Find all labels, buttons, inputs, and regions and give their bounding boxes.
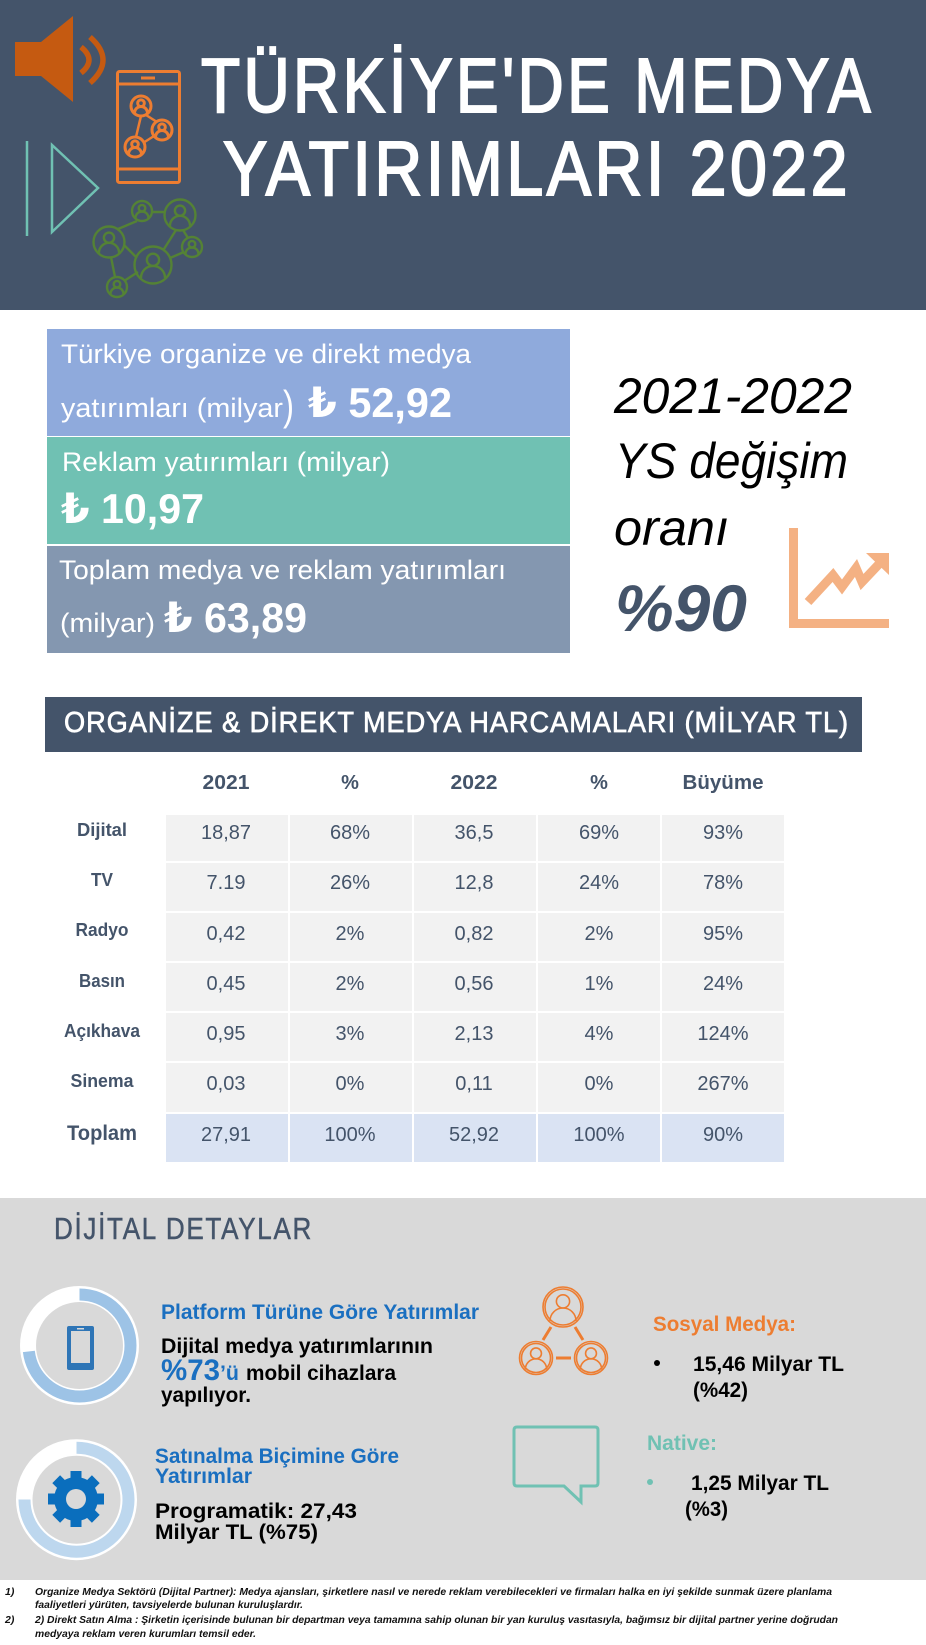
callout: YS değişim oranı: %90 bbox=[615, 571, 747, 645]
row: Açıkhava: Açıkhava bbox=[64, 1021, 141, 1041]
panel: toplam medya ve reklam yatırımları: ₺ 63,89 bbox=[164, 594, 307, 641]
text: sosyal medya: (%42) bbox=[693, 1379, 748, 1402]
panel: toplam medya ve reklam yatırımları bbox=[47, 546, 570, 653]
icon: play triangle bbox=[27, 141, 98, 236]
panel: organize ve direkt medya yatırımları: Türkiye organize ve direkt medya bbox=[61, 339, 472, 369]
footnotes: 1) bbox=[5, 1586, 15, 1598]
row: Dijital: 36,5 bbox=[455, 822, 493, 844]
row: Basın bbox=[79, 963, 784, 1011]
row: Açıkhava: 3% bbox=[336, 1023, 365, 1045]
text: native bbox=[647, 1432, 829, 1521]
table column headers bbox=[202, 772, 764, 794]
row: Basın: 2% bbox=[336, 973, 365, 995]
text: satınalma biçimine göre yatırımlar: Satınalma Biçimine Göre bbox=[155, 1445, 399, 1468]
text: native: Native: bbox=[647, 1432, 717, 1455]
row: Radyo: 95% bbox=[703, 923, 743, 945]
text: sosyal medya bbox=[653, 1313, 844, 1402]
footnotes: 2) Direkt Satın Alma : Şirketin içerisinde bulunan bir departman veya tamamına sahip olunan bir yan kuruluş vasıtasıyla, bağımsız bir dijital partner yerine doğrudan bbox=[34, 1614, 838, 1626]
row: Toplam: 90% bbox=[703, 1124, 743, 1146]
footnotes: faaliyetleri yürüten, tavsiyelerde bulunan kuruluşlardır. bbox=[35, 1599, 303, 1611]
row: Radyo: 2% bbox=[336, 923, 365, 945]
text: platform türüne göre yatırımlar: %73 bbox=[161, 1354, 220, 1387]
row: Toplam: 100% bbox=[573, 1124, 625, 1146]
text: sosyal medya: 15,46 Milyar TL bbox=[693, 1353, 844, 1376]
panel: organize ve direkt medya yatırımları: yatırımları (milyar bbox=[61, 393, 283, 423]
text: satınalma biçimine göre yatırımlar: Yatırımlar bbox=[155, 1465, 252, 1488]
row: Sinema: 0,11 bbox=[455, 1073, 493, 1095]
row: Sinema: 0% bbox=[585, 1073, 614, 1095]
row: Basın: 0,56 bbox=[455, 973, 493, 995]
row: Basın: Basın bbox=[79, 971, 125, 991]
row: TV: 78% bbox=[703, 872, 743, 894]
text: platform türüne göre yatırımlar: yapılıyor. bbox=[161, 1384, 251, 1407]
row: Açıkhava bbox=[64, 1013, 784, 1061]
panel: reklam yatırımları: ₺ 10,97 bbox=[61, 485, 204, 532]
table column headers: 2021 bbox=[202, 772, 250, 794]
text: satınalma biçimine göre yatırımlar bbox=[155, 1445, 399, 1544]
footnotes: medyaya reklam veren kurumları temsil eder. bbox=[35, 1628, 256, 1640]
panel: toplam medya ve reklam yatırımları: Toplam medya ve reklam yatırımları bbox=[59, 555, 506, 585]
footnotes bbox=[4, 1586, 838, 1640]
row: Toplam: Toplam bbox=[67, 1122, 137, 1145]
panel: reklam yatırımları: Reklam yatırımları (milyar) bbox=[62, 447, 390, 477]
heading: dijital detaylar: DİJİTAL DETAYLAR bbox=[54, 1211, 313, 1246]
header banner bbox=[0, 0, 926, 310]
row: Sinema bbox=[70, 1063, 784, 1112]
icon: gear bbox=[48, 1471, 104, 1527]
row: Basın: 24% bbox=[703, 973, 743, 995]
row: Radyo: 2% bbox=[585, 923, 614, 945]
donut: programatik 75% bbox=[16, 1439, 137, 1560]
icon: sosyal medya network bbox=[520, 1287, 608, 1374]
text: platform türüne göre yatırımlar bbox=[161, 1301, 479, 1407]
row: TV: 12,8 bbox=[455, 872, 493, 894]
callout: YS değişim oranı: oranı bbox=[614, 500, 729, 556]
row: Toplam bbox=[67, 1114, 784, 1162]
title bbox=[201, 43, 874, 212]
row: Toplam: 100% bbox=[324, 1124, 376, 1146]
footnotes: Organize Medya Sektörü (Dijital Partner): Medya ajansları, şirketlere nasıl ve nerede reklam verebilecekleri ve firmaları halka en iyi şekilde sunmak üzere planlama bbox=[35, 1586, 832, 1598]
icon: speech bubble bbox=[514, 1427, 598, 1502]
icon: speaker bbox=[15, 16, 103, 102]
table heading: ORGANİZE & DİREKT MEDYA HARCAMALARI (MİLYAR TL) bbox=[64, 706, 849, 739]
row: Basın: 1% bbox=[585, 973, 614, 995]
donut: mobil 73% bbox=[20, 1286, 139, 1405]
text: satınalma biçimine göre yatırımlar: Programatik: 27,43 bbox=[155, 1500, 357, 1523]
row: Açıkhava: 2,13 bbox=[455, 1023, 493, 1045]
row: Sinema: 267% bbox=[697, 1073, 749, 1095]
icon: smartphone network bbox=[117, 72, 180, 182]
panel: organize ve direkt medya yatırımları: ₺ 52,92 bbox=[308, 379, 452, 426]
table: medya harcamaları bbox=[64, 772, 784, 1162]
row: Dijital: 69% bbox=[579, 822, 619, 844]
icon: green people network bbox=[94, 200, 202, 297]
text: sosyal medya: Sosyal Medya: bbox=[653, 1313, 796, 1336]
row: TV: TV bbox=[91, 870, 113, 890]
row: Toplam: 52,92 bbox=[449, 1124, 499, 1146]
row: Radyo: 0,42 bbox=[207, 923, 245, 945]
text: platform türüne göre yatırımlar: Dijital medya yatırımlarının bbox=[161, 1335, 433, 1358]
table column headers: Büyüme bbox=[682, 772, 764, 794]
table column headers: 2022 bbox=[450, 772, 498, 794]
callout: YS değişim oranı: 2021-2022 bbox=[613, 368, 852, 424]
table heading bbox=[45, 697, 862, 752]
callout: YS değişim oranı: YS değişim bbox=[615, 433, 848, 489]
row: Radyo bbox=[76, 913, 784, 961]
row: Basın: 0,45 bbox=[207, 973, 245, 995]
row: TV: 7.19 bbox=[207, 872, 245, 894]
row: Dijital: 68% bbox=[330, 822, 370, 844]
icon: tablet bbox=[67, 1326, 94, 1370]
text: platform türüne göre yatırımlar: mobil cihazlara bbox=[246, 1362, 396, 1385]
row: Açıkhava: 4% bbox=[585, 1023, 614, 1045]
footnotes: 2) bbox=[4, 1614, 15, 1626]
row: TV: 24% bbox=[579, 872, 619, 894]
row: Sinema: Sinema bbox=[70, 1071, 134, 1091]
row: Toplam: 27,91 bbox=[201, 1124, 251, 1146]
row: Sinema: 0,03 bbox=[207, 1073, 245, 1095]
row: Açıkhava: 0,95 bbox=[207, 1023, 245, 1045]
row: Dijital bbox=[77, 815, 784, 861]
row: Açıkhava: 124% bbox=[697, 1023, 749, 1045]
row: Radyo: Radyo bbox=[76, 920, 128, 940]
panel: organize ve direkt medya yatırımları: ) bbox=[283, 382, 294, 429]
row: Dijital: Dijital bbox=[77, 820, 127, 840]
table column headers: % bbox=[590, 772, 608, 794]
text: platform türüne göre yatırımlar: Platform Türüne Göre Yatırımlar bbox=[161, 1301, 479, 1324]
panel: reklam yatırımları bbox=[47, 437, 570, 544]
text: native: (%3) bbox=[685, 1498, 728, 1521]
panel: dijital detaylar bbox=[0, 1198, 926, 1580]
row: Dijital: 18,87 bbox=[201, 822, 251, 844]
table column headers: % bbox=[341, 772, 359, 794]
row: TV: 26% bbox=[330, 872, 370, 894]
row: Radyo: 0,82 bbox=[455, 923, 493, 945]
callout: YS değişim oranı bbox=[613, 368, 852, 645]
text: native: 1,25 Milyar TL bbox=[691, 1472, 829, 1495]
panel: organize ve direkt medya yatırımları bbox=[47, 329, 570, 436]
row: TV bbox=[91, 863, 784, 911]
panel: toplam medya ve reklam yatırımları: (milyar) bbox=[60, 608, 155, 638]
text: platform türüne göre yatırımlar: ’ü bbox=[220, 1362, 239, 1385]
row: Dijital: 93% bbox=[703, 822, 743, 844]
text: satınalma biçimine göre yatırımlar: Milyar TL (%75) bbox=[155, 1521, 318, 1544]
row: Sinema: 0% bbox=[336, 1073, 365, 1095]
icon: rising chart bbox=[789, 528, 889, 628]
